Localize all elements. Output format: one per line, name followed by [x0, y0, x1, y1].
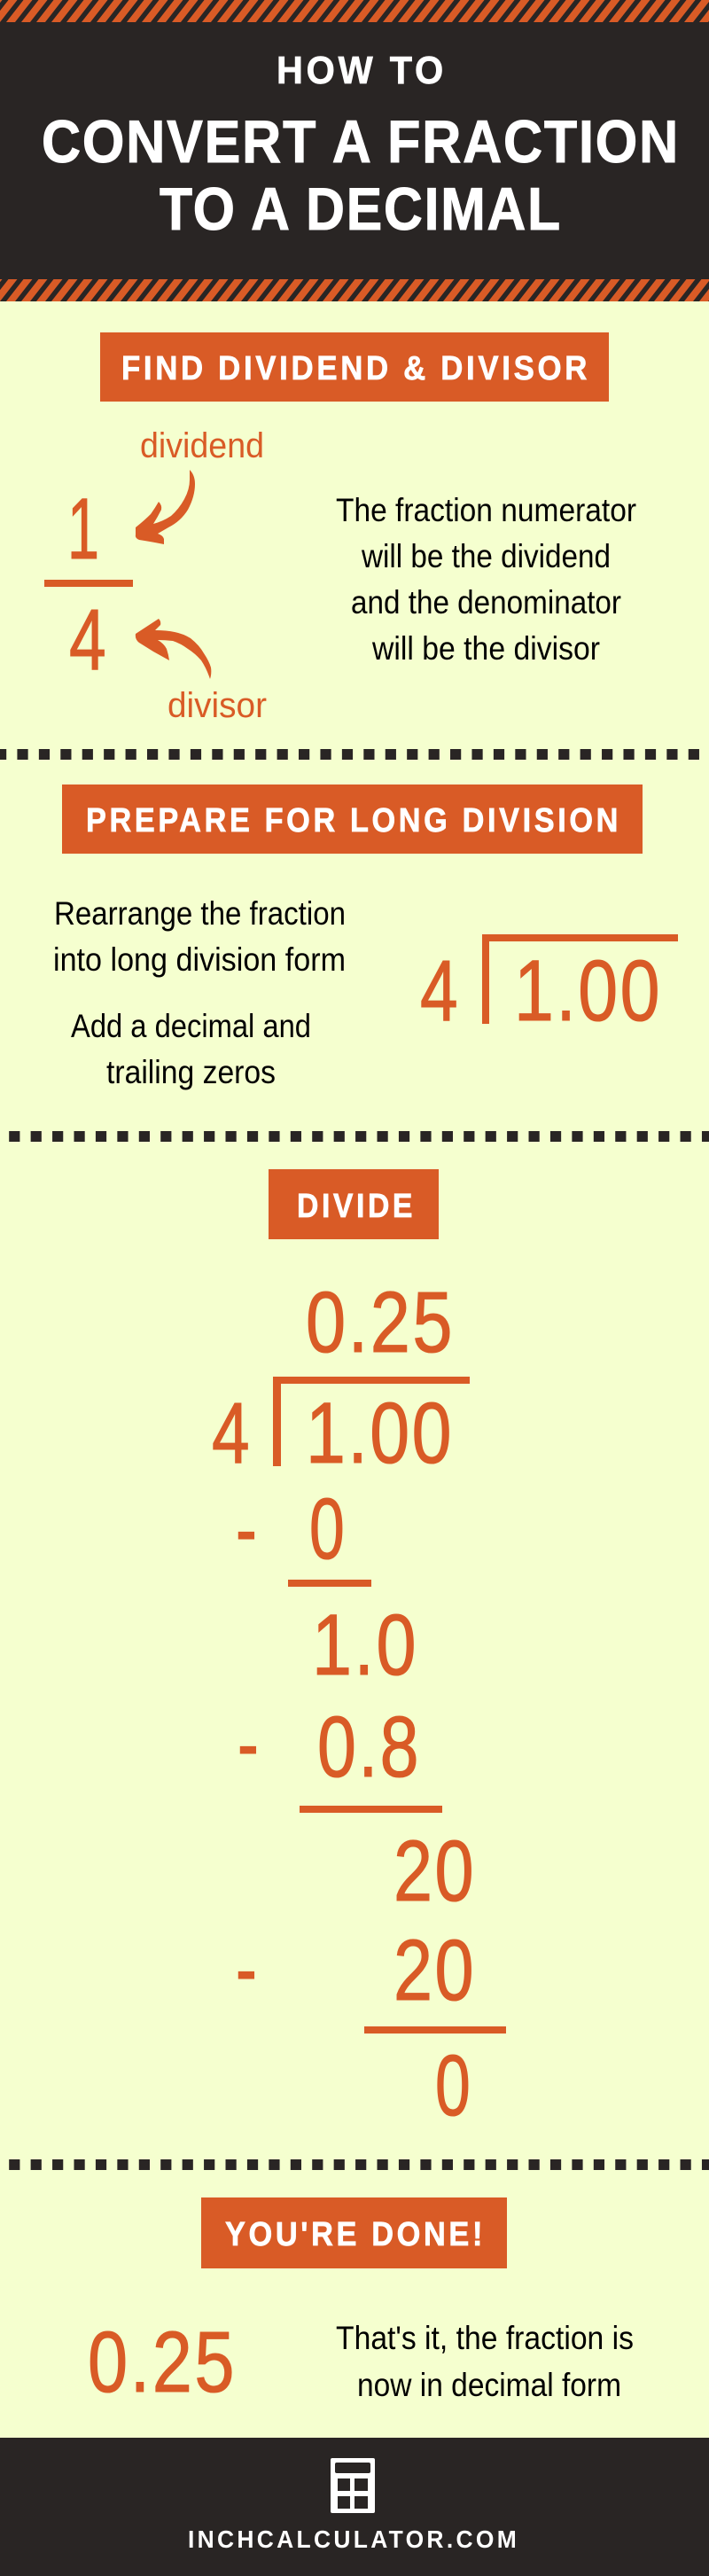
header banner	[0, 0, 709, 301]
step 1 result: 1.0	[312, 1596, 418, 1693]
icon: calculator	[331, 2458, 375, 2513]
explanation text: numerator and denominator: will be the divisor	[371, 630, 600, 667]
final answer: 0.25	[88, 2314, 237, 2410]
fraction bar	[44, 580, 133, 587]
section heading: prepare for long division: PREPARE FOR LONG DIVISION	[86, 802, 621, 839]
title: to a decimal: TO A DECIMAL	[160, 176, 562, 243]
numerator: 1: 1	[67, 480, 101, 577]
section heading: prepare for long division	[62, 785, 643, 854]
arrow: to numerator	[136, 470, 195, 544]
section heading: divide: DIVIDE	[297, 1188, 416, 1225]
closing text: now in decimal form	[357, 2367, 621, 2403]
explanation text: numerator and denominator: will be the dividend	[361, 538, 611, 574]
closing text: That's it, the fraction is	[336, 2320, 634, 2356]
section heading: you're done: YOU'RE DONE!	[225, 2216, 486, 2253]
explanation text: numerator and denominator: and the denominator	[351, 584, 621, 621]
step 2 result: 20	[393, 1823, 476, 1919]
title: how to: HOW TO	[277, 49, 447, 92]
section heading: you're done	[201, 2197, 507, 2268]
division bracket	[273, 1377, 470, 1466]
arrow: to denominator	[136, 619, 211, 679]
footer	[0, 2438, 709, 2576]
final remainder: 0	[435, 2037, 472, 2134]
long division setup: 1.00	[514, 942, 662, 1039]
explanation text: rearrange: trailing zeros	[106, 1054, 276, 1090]
long division worked example: 0.8	[317, 1698, 421, 1795]
section heading: divide	[269, 1169, 439, 1239]
denominator: 4: 4	[69, 591, 108, 688]
label: dividend: dividend	[140, 426, 264, 465]
website url: INCHCALCULATOR.COM	[188, 2525, 519, 2553]
explanation text: rearrange: into long division form	[53, 941, 346, 978]
closing text	[336, 2320, 634, 2403]
fraction diagram	[44, 426, 267, 725]
quotient: 0.25	[306, 1274, 455, 1370]
long division worked example	[212, 1274, 506, 2134]
explanation text: rearrange: Rearrange the fraction	[54, 895, 346, 932]
step 1 subtract: -	[236, 1480, 259, 1577]
section heading: find dividend and divisor: FIND DIVIDEND & DIVISOR	[121, 350, 590, 387]
divisor: 4	[212, 1385, 252, 1481]
explanation text: rearrange: Add a decimal and	[71, 1008, 311, 1044]
section heading: find dividend and divisor	[100, 332, 609, 402]
top hazard stripe band	[0, 0, 709, 22]
long division worked example: 0	[309, 1480, 347, 1577]
label: divisor: divisor	[168, 686, 267, 725]
step 3 subtract: -	[236, 1920, 259, 2017]
long division setup: 4	[420, 942, 460, 1039]
explanation text: numerator and denominator: The fraction numerator	[336, 492, 636, 528]
explanation text: rearrange	[53, 895, 346, 1090]
explanation text: numerator and denominator	[336, 492, 636, 667]
long division setup	[420, 934, 678, 1039]
dividend: 1.00	[306, 1385, 454, 1481]
long division worked example: 20	[393, 1922, 476, 2018]
step 2 subtract: -	[238, 1695, 261, 1791]
bottom hazard stripe band	[0, 279, 709, 301]
